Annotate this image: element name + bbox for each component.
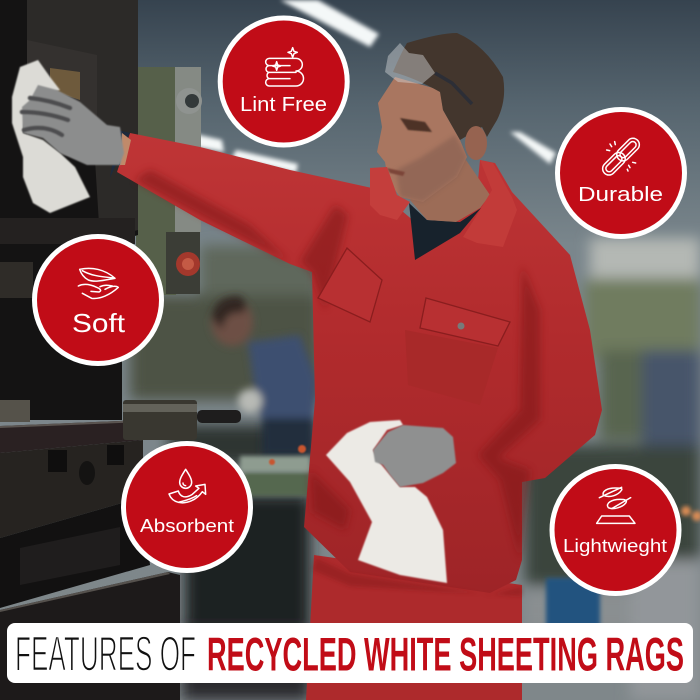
badge: Durable: [558, 110, 684, 236]
badge: Absorbent: [124, 444, 250, 570]
stubble shading: [396, 135, 467, 202]
rag in lower hand: [326, 420, 447, 583]
icon: water drop with arrow: [169, 469, 206, 503]
glove on raised hand: [22, 85, 124, 165]
title banner: [7, 623, 693, 683]
press cylinder: [123, 400, 241, 440]
green control box: [136, 67, 202, 295]
hair: [393, 33, 504, 140]
rag on the machine: [12, 60, 90, 213]
icon: feathers over scale: [597, 487, 635, 523]
mouth: [387, 168, 405, 176]
label: Soft: [72, 308, 126, 338]
orange bokeh lights: [681, 506, 700, 521]
title text: light part: FEATURES OF: [15, 628, 196, 682]
ear: [465, 126, 487, 160]
trousers: [306, 555, 522, 700]
dark press machine: [0, 0, 180, 700]
hem shadow: [312, 558, 522, 596]
neck: [410, 160, 490, 222]
background factory: blurred machines and floor: [130, 238, 700, 700]
label: Durable: [578, 184, 663, 206]
eye and brow: [400, 118, 432, 132]
coverall body and sleeves: [117, 133, 602, 593]
collars: [370, 160, 517, 247]
chest pockets: [318, 248, 510, 405]
icon: folded towels with sparkles: [266, 48, 303, 86]
glove on lower hand: [373, 425, 456, 487]
badge: Lint Free: [220, 18, 347, 145]
dark undershirt: [409, 203, 481, 260]
badge: Soft: [34, 236, 162, 364]
wrist and cuff: [110, 130, 131, 178]
label: Lightwieght: [563, 536, 667, 556]
coverall shading: [135, 170, 540, 560]
icon: feather over open hand: [78, 268, 118, 298]
ceiling lights: [195, 0, 556, 173]
badge: Lightwieght: [552, 466, 679, 594]
workbench with parts: [240, 445, 310, 496]
safety goggles: [385, 43, 472, 104]
face: [377, 77, 467, 202]
blue barrel: [546, 578, 600, 628]
label: Lint Free: [240, 94, 327, 116]
icon: chain links: [600, 136, 642, 178]
background worker: [211, 296, 317, 456]
label: Absorbent: [140, 516, 234, 536]
